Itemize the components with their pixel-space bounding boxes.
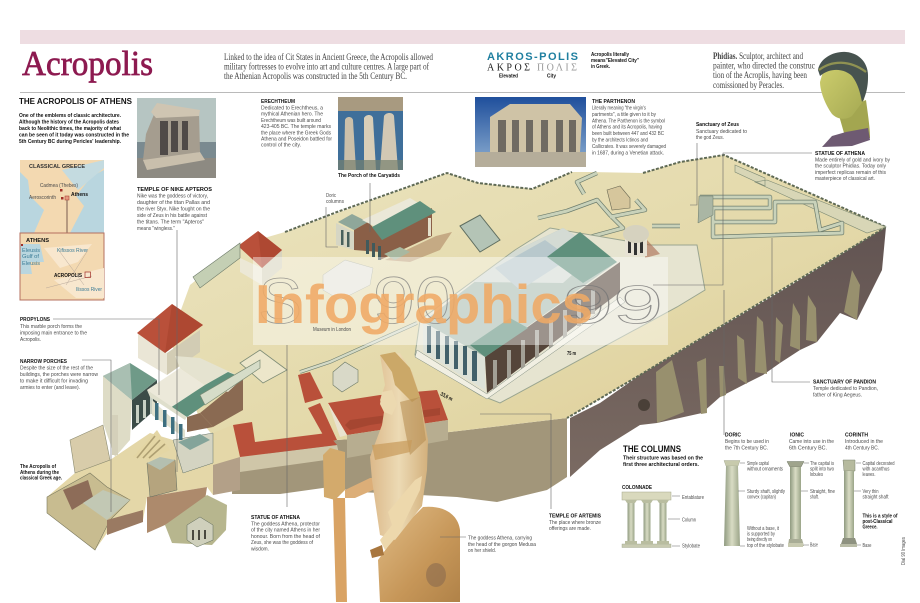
diagram: colonnade: Stylobate (682, 544, 700, 550)
stairs block (460, 215, 500, 252)
diagram: Doric column: Sturdy shaft, slightly (747, 489, 785, 495)
Erechtheum (336, 198, 452, 262)
etymology: Akros-Polis: Acropolis literally (591, 52, 629, 58)
title: Acropolis (22, 44, 153, 83)
diagram: Ionic column: The capital is (810, 461, 834, 467)
rim battlements (285, 155, 886, 418)
illustration: Acropolis cutaway (47, 155, 886, 550)
text: Narrow porches: NARROW PORCHES (20, 359, 67, 365)
small sanctuary building (607, 186, 630, 210)
Phidias text: Phidias. Sculptor, architect and (713, 52, 803, 62)
text: the Parthenon: of Athens and its Acropolis, having (592, 125, 662, 131)
text: Statue of Athena (lower): of the city named Athens in her (251, 528, 320, 534)
map: Classical Greece and Athens: ATHENS (26, 238, 49, 244)
text: Sanctuary of Zeus: the god Zeus. (696, 135, 724, 141)
text: temple of Nike Apteros: side of Zeus in his battle against (137, 213, 207, 219)
diagram: Doric column: DORIC (725, 432, 741, 438)
text: the Parthenon: THE PARTHENON (592, 99, 635, 105)
map: Classical Greece and Athens: Athens (71, 192, 88, 198)
diagram: Corinthian column: Very thin (862, 489, 879, 495)
map: Classical Greece and Athens: Gulf of (22, 254, 40, 260)
watermark (253, 257, 668, 345)
text: Narrow porches (20, 359, 98, 391)
intro paragraph: bold: back to Neolithic times, the majority of what (19, 126, 121, 132)
monument under the watermark (323, 260, 373, 300)
text: the Parthenon: partments", a title given to it by (592, 112, 656, 118)
watermark: Infographics (255, 273, 593, 335)
text: the Parthenon: by the architects Ictinos and (592, 138, 648, 144)
text: Statue of Athena (lower): STATUE OF ATHENA (251, 515, 300, 521)
Sanctuary of Zeus walls (538, 173, 842, 237)
diagram: Corinthian column: Base (862, 543, 872, 549)
text: Statue of Athena (upper): masterpiece of classical art. (815, 176, 875, 182)
map: Classical Greece and Athens: Kifissos River (57, 248, 88, 254)
text: temple of Nike Apteros: the titans. The term "Apteros" (137, 220, 204, 226)
text: Statue of Athena (lower): The goddess Athena, protector (251, 521, 320, 527)
photo: Parthenon (475, 97, 586, 167)
caption: classical Greek age (20, 464, 62, 482)
text: Statue of Athena (upper): imperfect replicas remain of this (815, 170, 886, 176)
Phidias text: comissioned by Peracles. (713, 81, 784, 91)
diagram: Corinthian column: CORINTH (845, 432, 868, 438)
map: Classical Greece and Athens: ACROPOLIS (54, 273, 82, 279)
diagram: Ionic column: shaft. (810, 494, 819, 500)
plateau surface (170, 155, 886, 460)
text: Sanctuary of Pandion (813, 380, 878, 398)
map: Classical Greece and Athens: Cadmea (Thebes) (40, 183, 78, 189)
text: Statue of Athena (upper): STATUE OF ATHENA (815, 151, 865, 157)
text: Propylons: Acropolis. (20, 337, 41, 343)
text: temple of Nike Apteros: TEMPLE OF NIKE APTEROS (137, 187, 212, 193)
label: Doric columns: columns (326, 199, 344, 205)
stepped gate of Zeus sanctuary (698, 196, 713, 223)
subheading: the columns: Their structure was based on the (623, 456, 703, 462)
label: Doric columns: Doric (326, 193, 336, 199)
diagram: colonnade: COLONNADE (622, 485, 652, 491)
diagram: Ionic column: split into two (810, 466, 834, 472)
text: Statue of Athena (upper): Made entirely of gold and ivory by (815, 158, 890, 164)
subheading: the columns (623, 456, 703, 468)
diagram: Corinthian column (840, 432, 898, 549)
intro text (224, 52, 433, 82)
text: Temple of Artemis: The place where bronze (549, 520, 601, 526)
credit: Dial 90 Images (901, 537, 907, 565)
diagram: Ionic column: 6th Century BC. (789, 446, 827, 452)
text: temple of Nike Apteros: Nike was the goddess of victory, (137, 194, 208, 200)
text: Erechtheum: 423-405 BC. The temple marks (261, 124, 331, 130)
header band (20, 30, 905, 44)
round temple (623, 225, 660, 258)
etymology: Akros-Polis: AKROS-POLIS (487, 51, 578, 63)
text: Erechtheum: Dedicated to Erechtheus, a (261, 106, 323, 112)
text: goddess with shield: on her shield. (468, 548, 496, 554)
map: Classical Greece and Athens: CLASSICAL GREECE (29, 164, 85, 170)
caption: classical Greek age: Athens during the (20, 470, 59, 476)
diagram: Corinthian column: leaves. (862, 472, 876, 478)
text: temple of Nike Apteros: means "wingless." (137, 226, 175, 232)
text: the Parthenon: in 1687, during a Venetian attack. (592, 150, 664, 156)
map: Classical Greece and Athens: Eleusis (22, 248, 40, 254)
text: Erechtheum: mythical Athenian hero. The (261, 112, 323, 118)
red-roofed temple, upper (238, 231, 282, 285)
Propylaea complex (47, 304, 260, 550)
intro paragraph: bold (19, 113, 129, 145)
text: Erechtheum (261, 99, 332, 149)
text: Erechtheum: control of the city. (261, 143, 301, 149)
text: Sanctuary of Zeus: Sanctuary dedicated to (696, 129, 747, 135)
Phidias text: tion of the Acroplis, having been (713, 70, 807, 81)
text: Temple of Artemis: offerings are made. (549, 526, 591, 532)
text: Statue of Athena (upper): the sculptor Phidias. Today only (815, 164, 886, 170)
panel: the columns (622, 432, 898, 550)
text: Erechtheum: Erechtheum was built around (261, 118, 321, 124)
icon: Phidias bust (812, 52, 880, 148)
text: Sanctuary of Pandion: SANCTUARY OF PANDION (813, 380, 876, 386)
Parthenon: 33,6 m (439, 391, 454, 403)
etymology: Akros-Polis: ΠΟΛΙΣ (537, 62, 577, 74)
map: Classical Greece and Athens: Eleusis (22, 261, 40, 267)
map: Classical Greece and Athens: Ilissos River (76, 287, 102, 293)
caption: classical Greek age: The Acropolis of (20, 464, 56, 470)
subheading: the columns: first three architectural orders. (623, 462, 699, 468)
intro paragraph: bold: can be seen of it today was constructed in the (19, 132, 129, 138)
diagram: Ionic column: Came into use in the (789, 439, 834, 445)
intro text: the Athenian Acropolis was constructed in the 5th Century BC. (224, 72, 407, 82)
diagram: Doric column: the 7th Century BC. (725, 446, 768, 452)
text: temple of Nike Apteros: daughter of the titan Pallas and (137, 200, 210, 206)
text: Erechtheum: the place where the Greek Gods (261, 130, 331, 136)
text: Temple of Artemis (549, 514, 601, 532)
text: Propylons (20, 317, 87, 343)
text: goddess with shield (468, 536, 536, 554)
etymology: Akros-Polis (487, 51, 639, 80)
caption: Porch of the Caryatids: The Porch of the Caryatids (338, 173, 400, 179)
front wall (232, 418, 567, 502)
intro paragraph: bold: 5th Century BC during Pericles' leadership. (19, 139, 121, 145)
diagram: Doric column: Without a base, it (747, 526, 779, 532)
text: temple of Nike Apteros: the river Styx. Nike fought on the (137, 206, 210, 212)
small propylaea (333, 362, 358, 392)
diagram: Doric column: convex (capitan) (747, 494, 776, 500)
heading: the columns: THE COLUMNS (623, 444, 681, 454)
diagram: Corinthian column: Capital decorated (862, 461, 895, 467)
diagram: colonnade: Entablature (682, 495, 704, 501)
red-roofed stoas (233, 372, 448, 472)
watermark: S (258, 265, 302, 337)
text: Narrow porches: Despite the size of the rest of the (20, 366, 93, 372)
caption: classical Greek age: classical Greek age. (20, 476, 62, 482)
text: Propylons: imposing main entrance to the (20, 330, 87, 336)
text: Sanctuary of Pandion: father of King Aegeus. (813, 392, 862, 398)
etymology: Akros-Polis: means"Elevated City" (591, 58, 639, 64)
diagram: Doric column: top of the stylobate (747, 543, 784, 549)
etymology: Akros-Polis: Elevated (499, 74, 518, 80)
label: Doric columns (326, 193, 344, 205)
text: Propylons: This marble porch forms the (20, 324, 82, 330)
diagram: Corinthian column: This is a style of (862, 514, 898, 520)
diagram: Ionic column: Base (810, 542, 818, 548)
illustration: statue of Athena (323, 352, 460, 602)
photo: temple of Nike (137, 98, 216, 178)
Phidias text (713, 52, 815, 91)
right fortification wall (570, 227, 886, 477)
diagram: colonnade: Column (682, 518, 696, 524)
diagram: Corinthian column: straight shaft (862, 494, 889, 500)
Phidias text: painter, who directed the construc (713, 62, 815, 72)
text: Sanctuary of Zeus: Sanctuary of Zeus (696, 122, 739, 128)
text: the Parthenon: been built between 447 and 432 BC (592, 131, 664, 137)
intro text: military fortresses to evolve into art and culture centres. A large part of (224, 62, 430, 72)
etymology: Akros-Polis: in Greek. (591, 64, 610, 70)
text: Narrow porches: armies to enter (and leave). (20, 385, 80, 391)
diagram: Ionic column: lobules (810, 472, 823, 478)
diagram: Doric column (724, 432, 785, 549)
text: Sanctuary of Zeus (696, 122, 747, 141)
diagram: Ionic column: Straight, fine (810, 489, 835, 495)
Parthenon: 75 m (567, 351, 576, 357)
text: Erechtheum: Athena and Poseidon battled for (261, 136, 332, 142)
diagram: colonnade (622, 485, 704, 550)
diagram: Corinthian column: with acanthus (862, 466, 890, 472)
text: Erechtheum: ERECHTHEUM (261, 99, 295, 105)
text: Statue of Athena (lower): Zeus, she was the goddess of (251, 540, 313, 546)
text: Statue of Athena (lower): wisdom. (251, 546, 269, 552)
text: Narrow porches: to make it difficult for invading (20, 378, 88, 384)
text: Statue of Athena (upper) (815, 151, 890, 182)
text: Sanctuary of Pandion: Temple dedicated to Pandion, (813, 386, 878, 392)
diagram: Ionic column: IONIC (790, 432, 804, 438)
text: the Parthenon: Athena. The Parthenon is the symbol (592, 118, 665, 124)
text: goddess with shield: the head of the gorgon Medusa (468, 542, 536, 548)
text: goddess with shield: The goddess Athena, carrying (468, 536, 532, 542)
diagram: Doric column: without ornaments (747, 466, 783, 472)
diagram: Corinthian column: post-Classical (862, 519, 893, 525)
watermark: Museum in London (313, 327, 351, 333)
map: Classical Greece and Athens (20, 160, 104, 300)
watermark: 99 (563, 275, 663, 335)
leader lines (53, 143, 812, 537)
text: Temple of Artemis: TEMPLE OF ARTEMIS (549, 514, 601, 520)
sacred way wall and statue enclosure (240, 323, 417, 383)
text: temple of Nike Apteros (137, 187, 212, 232)
photo: Porch of the Caryatids (338, 97, 403, 170)
diagram: Ionic column (787, 432, 835, 548)
text: Statue of Athena (lower) (251, 515, 321, 552)
text: Propylons: PROPYLONS (20, 317, 50, 323)
map: Classical Greece and Athens: Aeroscorinth (29, 195, 56, 201)
watermark: 90 (373, 263, 457, 337)
text: Narrow porches: buildings, the porches were narrow (20, 372, 98, 378)
text: the Parthenon: Callicrates. It was severely damaged (592, 144, 666, 150)
intro text: Linked to the idea of Cit States in Ancient Greece, the Acropolis allowed (224, 52, 433, 63)
diagram: Corinthian column: Introduced in the (845, 439, 883, 445)
text: the Parthenon: Literally meaning "the virgin's (592, 106, 646, 112)
diagram: Doric column: being directly on (747, 537, 772, 543)
etymology: Akros-Polis: ΑΚΡΟΣ (487, 62, 530, 74)
diagram: Doric column: Begins to be used in (725, 439, 769, 445)
Nike bastion walls (193, 243, 240, 288)
diagram: Corinthian column: Greece. (862, 524, 878, 530)
etymology: Akros-Polis: City (547, 74, 556, 80)
Parthenon (415, 228, 705, 403)
text: the Parthenon (592, 99, 666, 156)
diagram: Corinthian column: 4th Century BC. (845, 446, 879, 452)
diagram: Doric column: Simple capital (747, 461, 769, 467)
diagram: Doric column: is supported by (747, 532, 775, 538)
text: Statue of Athena (lower): honour. Born from the head of (251, 534, 321, 540)
heading: the Acropolis of Athens: THE ACROPOLIS OF ATHENS (19, 96, 132, 106)
intro paragraph: bold: One of the emblems of classic architecture. (19, 113, 121, 119)
intro paragraph: bold: Although the history of the Acropolis dates (19, 120, 119, 126)
